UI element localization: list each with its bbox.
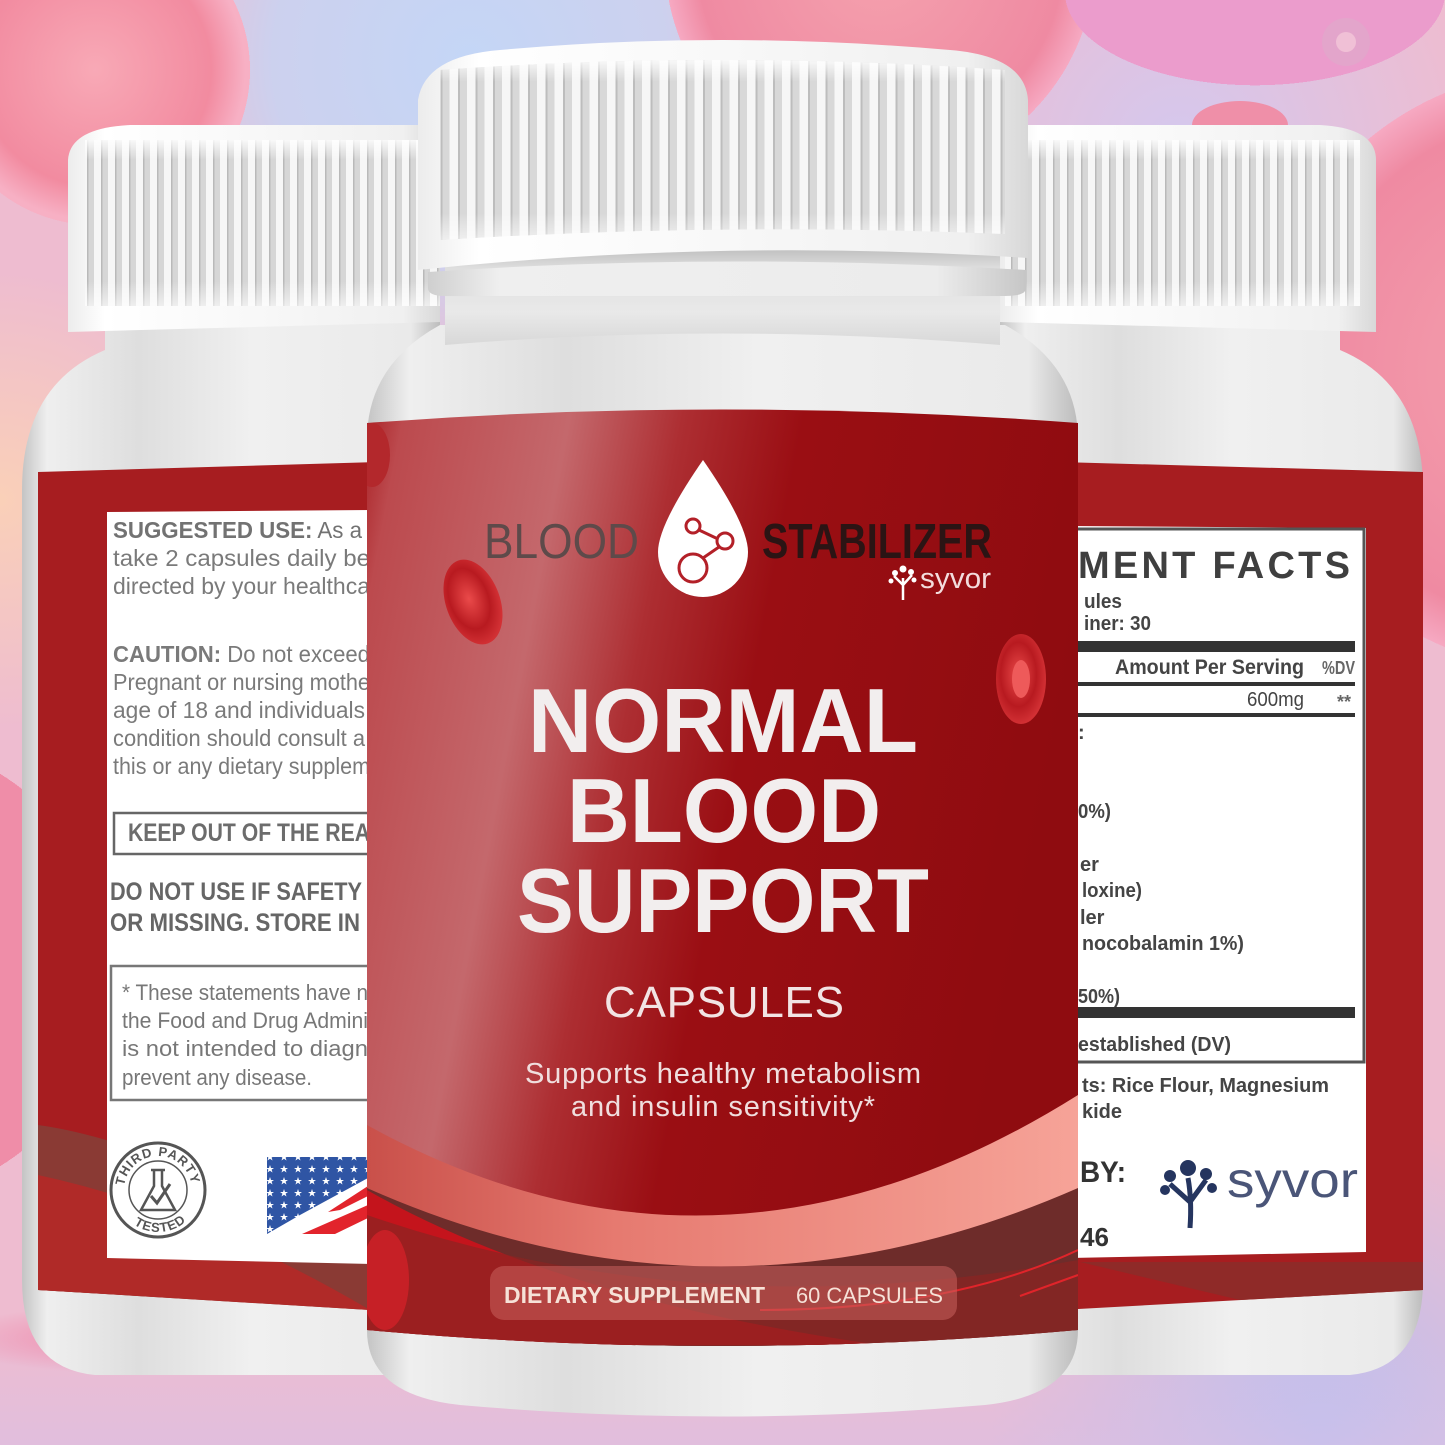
disclaimer box: is not intended to diagn: [122, 1036, 368, 1061]
badge: third party tested: THIRD PARTY: [115, 1147, 200, 1184]
back bottle right: [1000, 125, 1423, 1375]
cap right: [1000, 125, 1376, 332]
pill: dietary supplement: [490, 1266, 957, 1320]
logo: blood stabilizer: BLOOD: [484, 515, 639, 569]
title: [517, 671, 929, 952]
title: BLOOD: [567, 761, 881, 862]
ingredient fragments: ler: [1080, 907, 1105, 929]
subtitle: capsules: CAPSULES: [604, 978, 844, 1027]
disclaimer box: [111, 966, 373, 1100]
white panel: directions: this or any dietary supplem: [113, 753, 370, 779]
supplement facts panel: **: [1337, 692, 1351, 712]
disclaimer box: the Food and Drug Admini: [122, 1008, 368, 1033]
ingredient fragments: :: [1078, 722, 1085, 744]
tagline: and insulin sensitivity*: [571, 1091, 875, 1123]
logo: blood stabilizer: STABILIZER: [762, 515, 992, 569]
supplement facts panel: 600mg: [1247, 689, 1304, 711]
ingredient fragments: [1078, 722, 1244, 1056]
back bottle left: [22, 125, 440, 1375]
heading: supplement facts: MENT FACTS: [1078, 545, 1350, 587]
bottle body left: [22, 318, 440, 1375]
title: NORMAL: [528, 671, 918, 772]
pill: dietary supplement: DIETARY SUPPLEMENT: [504, 1282, 765, 1308]
supplement facts panel: BY:: [1080, 1156, 1126, 1189]
text: suggested use: SUGGESTED USE: As a: [113, 517, 362, 543]
keep out box: KEEP OUT OF THE REA: [128, 819, 370, 847]
supplement facts panel: [1070, 526, 1366, 1258]
label: [354, 410, 1078, 1356]
bottle body: [367, 325, 1078, 1416]
white panel: directions: Pregnant or nursing mothe: [113, 669, 370, 695]
text: do not use: DO NOT USE IF SAFETY: [110, 878, 362, 906]
supplement facts panel: 46: [1080, 1222, 1109, 1252]
wave swoosh: [367, 1095, 1078, 1356]
badge: third party tested: TESTED: [136, 1216, 184, 1232]
tagline: [525, 1058, 921, 1123]
ingredient fragments: 0%): [1078, 801, 1111, 823]
supplement facts panel: kide: [1082, 1101, 1122, 1123]
disclaimer box: prevent any disease.: [122, 1065, 312, 1090]
bottle body right: [1000, 318, 1423, 1375]
logo: blood stabilizer: [484, 460, 992, 600]
label left: [38, 462, 378, 1310]
red blood cells: [354, 423, 1046, 1330]
tagline: Supports healthy metabolism: [525, 1058, 921, 1090]
cap left: [68, 125, 440, 332]
badge: third party tested: [110, 1142, 206, 1238]
white panel: directions: condition should consult a: [113, 725, 365, 751]
pill: dietary supplement: 60 CAPSULES: [796, 1283, 943, 1308]
ingredient fragments: established (DV): [1078, 1034, 1231, 1056]
ingredient fragments: nocobalamin 1%): [1082, 933, 1244, 955]
white panel: directions: age of 18 and individuals: [113, 697, 365, 723]
serving info: ules: [1084, 591, 1122, 613]
other ingredients: ts: Rice Flour, Magnesium: [1082, 1075, 1329, 1097]
text: caution: CAUTION: Do not exceed: [113, 641, 370, 667]
ingredient fragments: er: [1080, 854, 1099, 876]
ingredient fragments: 50%): [1078, 986, 1120, 1008]
supplement facts panel: %DV: [1322, 658, 1355, 678]
white panel: directions: [107, 510, 370, 1264]
front bottle: [354, 40, 1078, 1416]
keep out box: [114, 813, 376, 854]
cap: [418, 40, 1028, 270]
brand: syvor: [888, 563, 991, 600]
icon: blood drop: [658, 460, 748, 597]
table header: Amount Per Serving: [1115, 656, 1304, 679]
disclaimer box: * These statements have n: [122, 980, 368, 1005]
white panel: directions: directed by your healthca: [113, 573, 370, 599]
logo: syvor: [1160, 1152, 1358, 1228]
title: SUPPORT: [517, 851, 929, 952]
white panel: directions: take 2 capsules daily be: [113, 545, 370, 571]
ingredient fragments: loxine): [1082, 880, 1142, 902]
brand: syvor: syvor: [920, 563, 991, 595]
logo: syvor: syvor: [1227, 1152, 1358, 1208]
white panel: directions: OR MISSING. STORE IN: [110, 909, 360, 937]
icon: usa flag: [267, 1157, 368, 1234]
label right: [1060, 462, 1423, 1310]
supplement facts panel: iner: 30: [1084, 613, 1151, 635]
